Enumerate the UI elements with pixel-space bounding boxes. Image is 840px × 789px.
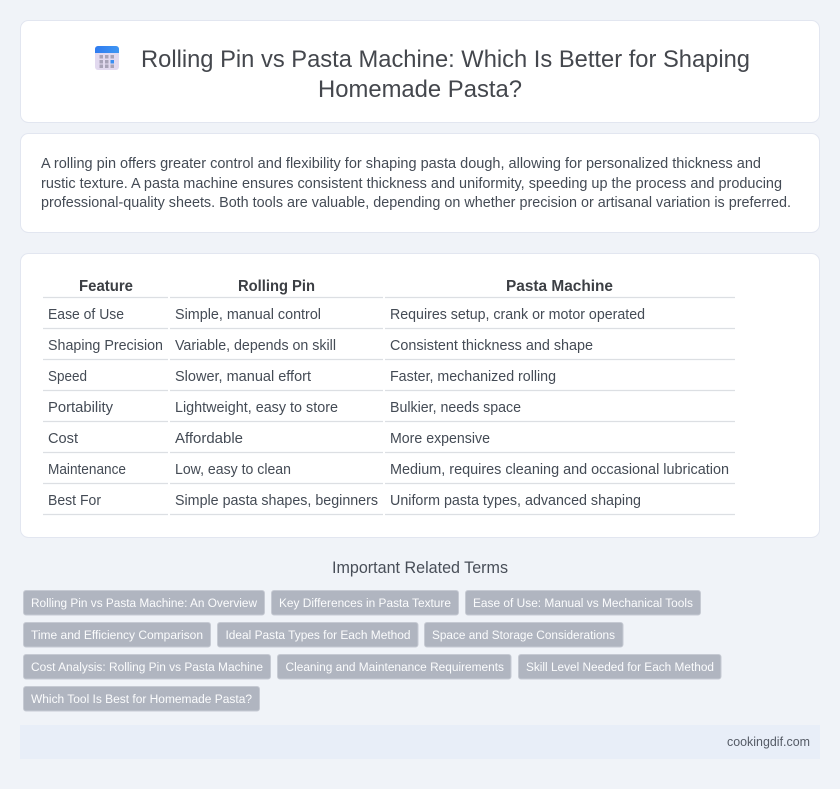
row: shaping precision: Variable, depends on skill [175, 338, 336, 354]
panel: introduction text [20, 134, 820, 232]
row: ease of use [43, 307, 735, 328]
tag [272, 590, 458, 615]
panel: introduction text: professional-quality sheets. Both tools are valuable, depending on whether precision or artisanal variation is preferred. [41, 195, 791, 211]
tag [24, 686, 260, 711]
row: speed: Faster, mechanized rolling [390, 369, 556, 385]
row: shaping precision: Shaping Precision [48, 338, 163, 354]
table header row: Pasta Machine [506, 278, 613, 295]
row: cost: Cost [48, 431, 78, 447]
row: best for: Best For [48, 493, 101, 509]
row: cost: More expensive [390, 431, 490, 447]
tag: Key Differences in Pasta Texture [279, 596, 451, 610]
tag: Which Tool Is Best for Homemade Pasta? [31, 692, 252, 706]
panel: introduction text: A rolling pin offers greater control and flexibility for shaping pasta dough, allowing for personalized thickness and [41, 156, 761, 172]
row: portability: Lightweight, easy to store [175, 400, 338, 416]
row: ease of use: Simple, manual control [175, 307, 321, 323]
title: Rolling Pin vs Pasta Machine: Which Is Better for Shaping [141, 46, 750, 73]
row: maintenance: Low, easy to clean [175, 462, 291, 478]
row: portability: Portability [48, 400, 114, 416]
heading: important related terms: Important Related Terms [332, 559, 508, 577]
title: Homemade Pasta? [318, 76, 522, 103]
row: portability [43, 400, 735, 422]
row: cost: Affordable [175, 431, 243, 447]
row: best for: Uniform pasta types, advanced shaping [390, 493, 641, 509]
tag: Rolling Pin vs Pasta Machine: An Overview [31, 596, 257, 610]
row: speed [43, 369, 735, 390]
tag: Ease of Use: Manual vs Mechanical Tools [473, 596, 693, 610]
tag [24, 590, 264, 615]
tag [24, 622, 210, 647]
row: speed: Slower, manual effort [175, 369, 311, 385]
row: ease of use: Ease of Use [48, 307, 124, 323]
footer bar: cookingdif.com [727, 734, 810, 749]
table header row [43, 278, 735, 298]
table header row: Feature [79, 278, 133, 295]
header panel [20, 20, 820, 122]
row: cost [43, 431, 735, 452]
row: shaping precision [43, 338, 735, 360]
footer bar [20, 725, 820, 759]
row: maintenance [43, 462, 735, 484]
row: shaping precision: Consistent thickness and shape [390, 338, 593, 354]
title [141, 46, 750, 103]
row: speed: Speed [48, 369, 87, 385]
row: best for [43, 493, 735, 514]
row: portability: Bulkier, needs space [390, 400, 521, 416]
tag [24, 654, 270, 679]
tag: Time and Efficiency Comparison [31, 628, 203, 642]
related terms tags [24, 590, 721, 711]
tag [518, 654, 721, 679]
tag: Space and Storage Considerations [432, 628, 615, 642]
tag: Skill Level Needed for Each Method [526, 660, 714, 674]
tag [218, 622, 418, 647]
row: maintenance: Maintenance [48, 462, 126, 478]
tag: Cost Analysis: Rolling Pin vs Pasta Machine [31, 660, 263, 674]
row: best for: Simple pasta shapes, beginners [175, 493, 378, 509]
tag [466, 590, 700, 615]
icon: calendar grid [95, 46, 119, 70]
tag: Ideal Pasta Types for Each Method [226, 628, 411, 642]
panel: comparison table [20, 254, 820, 538]
tag [278, 654, 511, 679]
row: ease of use: Requires setup, crank or motor operated [390, 307, 645, 323]
tag: Cleaning and Maintenance Requirements [286, 660, 504, 674]
table header row: Rolling Pin [238, 278, 315, 295]
row: maintenance: Medium, requires cleaning and occasional lubrication [390, 462, 729, 478]
panel: introduction text: rustic texture. A pasta machine ensures consistent thickness and uniformity, speeding up the process and producing [41, 176, 782, 192]
tag [424, 622, 623, 647]
